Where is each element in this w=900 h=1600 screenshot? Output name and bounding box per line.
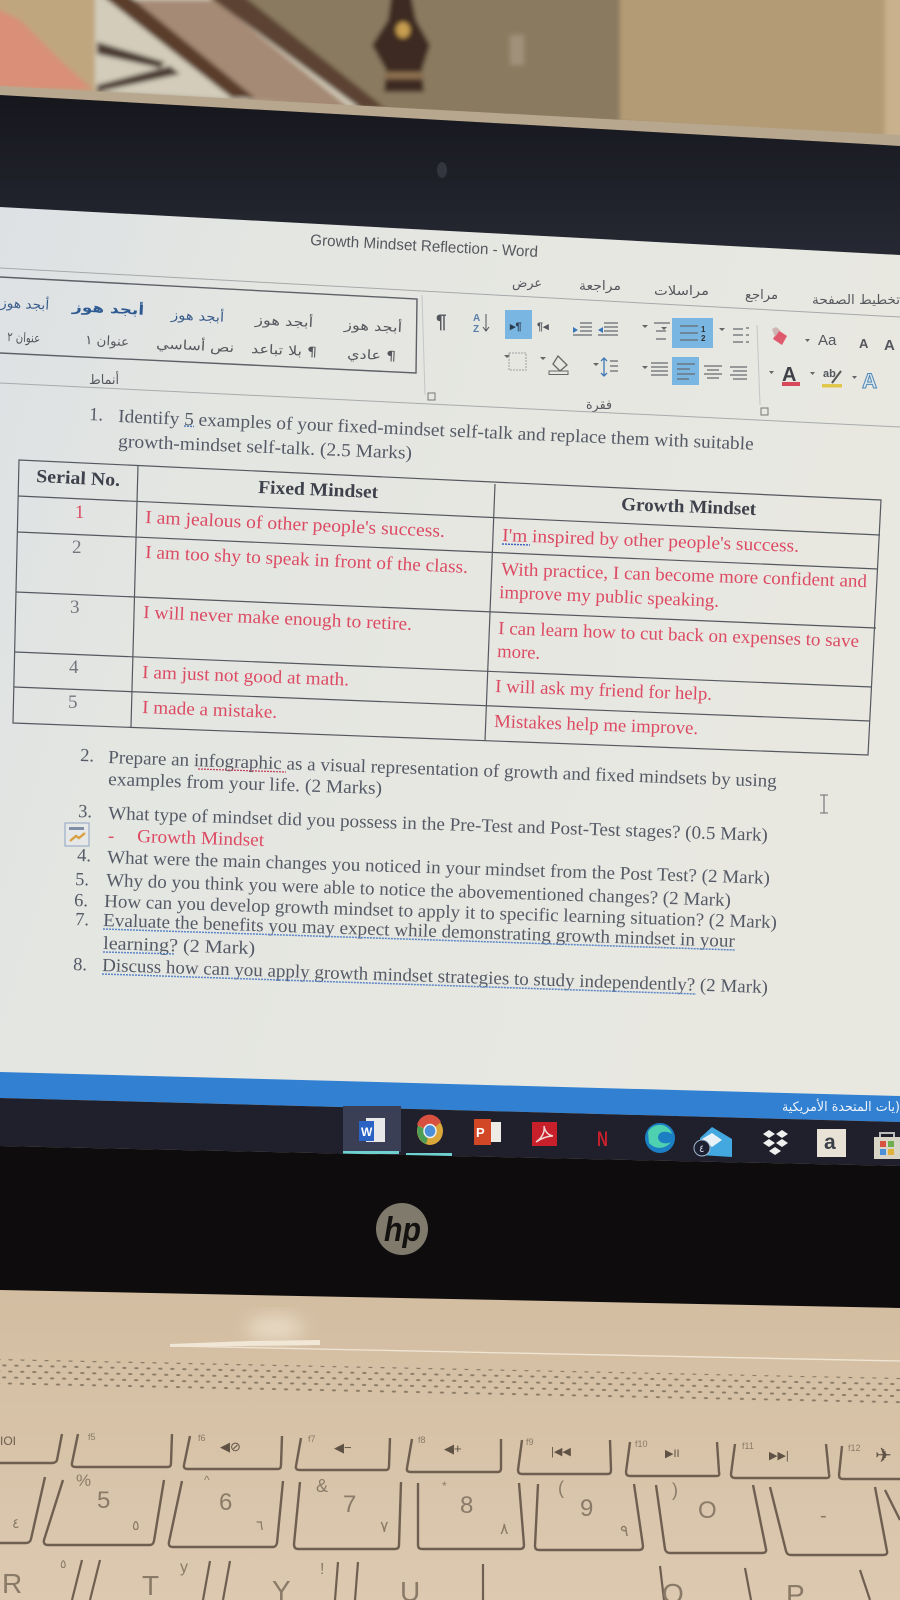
function key row: f10 — [635, 1439, 648, 1449]
icon: powerpoint — [474, 1119, 501, 1145]
function key row: f11 — [742, 1441, 754, 1451]
number key row: 6 — [219, 1489, 232, 1516]
function key row: ▶II — [665, 1448, 680, 1460]
lower bezel with HP logo — [0, 1146, 900, 1309]
styles gallery: عادي ¶ — [347, 347, 397, 365]
number key row: O — [698, 1497, 717, 1524]
mindset table — [13, 460, 881, 755]
number key row: ٨ — [500, 1521, 509, 1538]
paragraph and font toolbar: فقرة — [586, 398, 612, 413]
ribbon tabs — [0, 268, 900, 317]
row 1: 1 — [75, 503, 84, 523]
letter key row — [2, 1557, 870, 1600]
row 2 — [72, 537, 868, 612]
taskbar — [0, 1098, 900, 1166]
paragraph and font toolbar: A — [473, 313, 480, 324]
row 4: I am just not good at math. — [142, 663, 349, 691]
number key row: ( — [558, 1478, 564, 1498]
letter key row: ! — [320, 1561, 324, 1578]
function key row: f8 — [418, 1435, 426, 1445]
styles gallery: نص أساسي — [156, 335, 235, 356]
letter key row: ٥ — [60, 1557, 66, 1571]
question 7: learning? (2 Mark) — [103, 934, 255, 959]
background room — [0, 0, 900, 250]
question 3 with answer: Growth Mindset — [137, 827, 265, 851]
row 4: I will ask my friend for help. — [495, 677, 712, 705]
icon: amazon: a — [824, 1131, 836, 1154]
question 2: 2. — [80, 746, 94, 766]
function key row: ✈ — [875, 1445, 892, 1467]
letter key row: y — [180, 1559, 188, 1576]
number key row: ٥ — [132, 1517, 140, 1533]
paragraph and font toolbar — [0, 295, 900, 427]
question 2: examples from your life. (2 Marks) — [108, 770, 382, 799]
question 5: 5. — [75, 870, 89, 890]
row 5: I made a mistake. — [142, 698, 277, 723]
icon: hp logo: hp — [384, 1211, 421, 1249]
question 2: Prepare an infographic as a visual representation of growth and fixed mindsets by using — [108, 748, 777, 792]
function key row: f9 — [526, 1437, 534, 1447]
paragraph and font toolbar: A — [782, 364, 796, 386]
ribbon tabs: مراجع — [745, 288, 778, 303]
paragraph and font toolbar: 1 — [701, 325, 706, 334]
row 3: I will never make enough to retire. — [143, 603, 412, 635]
icon: edge — [645, 1123, 675, 1153]
status bar — [0, 1072, 900, 1122]
number key row: 7 — [343, 1491, 356, 1518]
speaker grille — [0, 1359, 900, 1404]
row 3: 3 — [70, 597, 80, 618]
icon: amazon — [817, 1129, 846, 1157]
row 2: 2 — [72, 537, 82, 558]
function key row: ◀+ — [444, 1441, 462, 1456]
question 3 with answer: 3. — [78, 802, 92, 822]
row 5: Mistakes help me improve. — [494, 712, 698, 739]
icon: acrobat — [532, 1122, 557, 1146]
row 4: 4 — [69, 657, 79, 678]
styles gallery: أبجد هوز — [70, 298, 145, 319]
ribbon tabs: عرض — [512, 276, 542, 291]
status bar: يات المتحدة الأمريكية) — [782, 1098, 900, 1115]
number key row: 9 — [580, 1495, 593, 1522]
function key row: ◀− — [334, 1440, 352, 1455]
number key row: - — [820, 1505, 827, 1527]
function key row: f12 — [848, 1443, 861, 1453]
styles gallery: أنماط — [89, 371, 119, 388]
question 6: How can you develop growth mindset to apply it to specific learning situation? (2 Mark) — [104, 892, 777, 933]
function key row: |◀◀ — [551, 1446, 571, 1458]
function key row: ▶▶| — [769, 1450, 789, 1462]
question 4: What were the main changes you noticed in your mindset from the Post Test? (2 Mark) — [107, 848, 770, 889]
table header: Growth Mindset — [621, 495, 757, 520]
paragraph and font toolbar: Z — [473, 324, 479, 335]
paragraph and font toolbar: 2 — [701, 334, 706, 343]
letter key row: R — [2, 1568, 22, 1599]
function key row: f6 — [198, 1433, 206, 1443]
function key row — [0, 1432, 900, 1479]
styles gallery: أبجد هوز — [343, 316, 403, 336]
row 3 — [70, 597, 859, 664]
number key row: & — [316, 1476, 328, 1496]
icon: powerpoint: P — [476, 1125, 485, 1140]
icon: word — [343, 1106, 401, 1154]
function key row: ◀⊘ — [220, 1439, 241, 1454]
styles gallery: أبجد هوز — [254, 311, 314, 331]
paragraph and font toolbar: ¶ — [436, 312, 447, 333]
styles gallery: عنوان ٢ — [7, 330, 41, 347]
row 2: I am too shy to speak in front of the class. — [145, 543, 468, 578]
paragraph and font toolbar: A — [884, 337, 895, 354]
number key row: 5 — [97, 1487, 110, 1514]
number key row: ٧ — [380, 1519, 389, 1536]
ribbon tabs: تخطيط الصفحة — [812, 293, 900, 308]
icon: comment note — [65, 823, 89, 846]
styles gallery: عنوان ١ — [85, 333, 130, 350]
styles gallery — [0, 277, 417, 388]
number key row — [0, 1471, 900, 1555]
icon: mail — [694, 1127, 732, 1157]
paragraph and font toolbar: ab — [823, 368, 836, 380]
row 5: 5 — [68, 692, 78, 713]
question 8: Discuss how can you apply growth mindset strategies to study independently? (2 Mark) — [102, 956, 768, 998]
icon: netflix: N — [597, 1128, 608, 1151]
row 1: I'm inspired by other people's success. — [502, 526, 799, 557]
icon: text cursor — [820, 795, 828, 813]
function key row: IOI — [0, 1434, 16, 1448]
laptop deck — [0, 1290, 900, 1600]
question 4: 4. — [77, 846, 91, 866]
icon: mail: ٤ — [699, 1144, 704, 1155]
number key row: * — [442, 1479, 447, 1493]
number key row: ٩ — [620, 1523, 629, 1540]
function key row: f7 — [308, 1434, 316, 1444]
paragraph and font toolbar: ¶◂ — [537, 321, 549, 333]
question 6: 6. — [74, 891, 88, 911]
row 1 — [75, 503, 799, 557]
styles gallery: أبجد هوز — [0, 294, 50, 314]
paragraph and font toolbar: A — [862, 370, 877, 393]
icon: chrome — [406, 1115, 452, 1156]
row 2: improve my public speaking. — [499, 583, 719, 612]
screen background — [0, 207, 900, 1097]
icon: dropbox — [763, 1130, 788, 1155]
number key row: ) — [672, 1480, 678, 1500]
row 3: more. — [497, 642, 541, 664]
question 7: Evaluate the benefits you may expect while demonstrating growth mindset in your — [103, 911, 735, 952]
number key row: ٤ — [12, 1515, 20, 1531]
row 3: I can learn how to cut back on expenses to save — [498, 619, 859, 652]
table header: Fixed Mindset — [258, 478, 379, 503]
number key row: ^ — [204, 1473, 210, 1487]
question 1: growth-mindset self-talk. (2.5 Marks) — [118, 432, 412, 464]
table header: Serial No. — [36, 467, 121, 491]
question 5: Why do you think you were able to notice the abovementioned changes? (2 Mark) — [106, 871, 731, 911]
row 1: I am jealous of other people's success. — [145, 508, 445, 542]
window title: Growth Mindset Reflection - Word — [310, 232, 538, 261]
row 2: With practice, I can become more confident and — [501, 560, 868, 592]
number key row: 8 — [460, 1492, 473, 1519]
icon: hp logo — [376, 1203, 428, 1255]
function key row: f5 — [88, 1432, 96, 1442]
table header — [36, 467, 757, 520]
number key row: ٦ — [256, 1517, 264, 1533]
styles gallery: بلا تباعد ¶ — [251, 342, 317, 360]
question 1: Identify 5 examples of your fixed-mindset self-talk and replace them with suitable — [118, 407, 754, 455]
paragraph and font toolbar: Aa — [818, 332, 837, 349]
question 7: 7. — [75, 910, 89, 930]
question 3 with answer: What type of mindset did you possess in the Pre-Test and Post-Test stages? (0.5 Mark) — [108, 804, 768, 846]
paragraph and font toolbar: ▸¶ — [509, 321, 522, 333]
row 4 — [69, 657, 712, 705]
icon: store — [874, 1133, 900, 1159]
ribbon tabs: مراسلات — [654, 284, 709, 299]
laptop bezel top — [0, 86, 900, 256]
ribbon tabs: مراجعة — [579, 279, 621, 294]
styles gallery: أبجد هوز — [170, 306, 225, 326]
number key row: % — [76, 1471, 91, 1490]
paragraph and font toolbar: A — [859, 336, 869, 351]
question 3 with answer: - — [108, 827, 114, 847]
row 5 — [68, 692, 698, 739]
icon: word: W — [361, 1125, 373, 1139]
question 1: 1. — [89, 405, 104, 426]
question 8: 8. — [73, 955, 87, 975]
